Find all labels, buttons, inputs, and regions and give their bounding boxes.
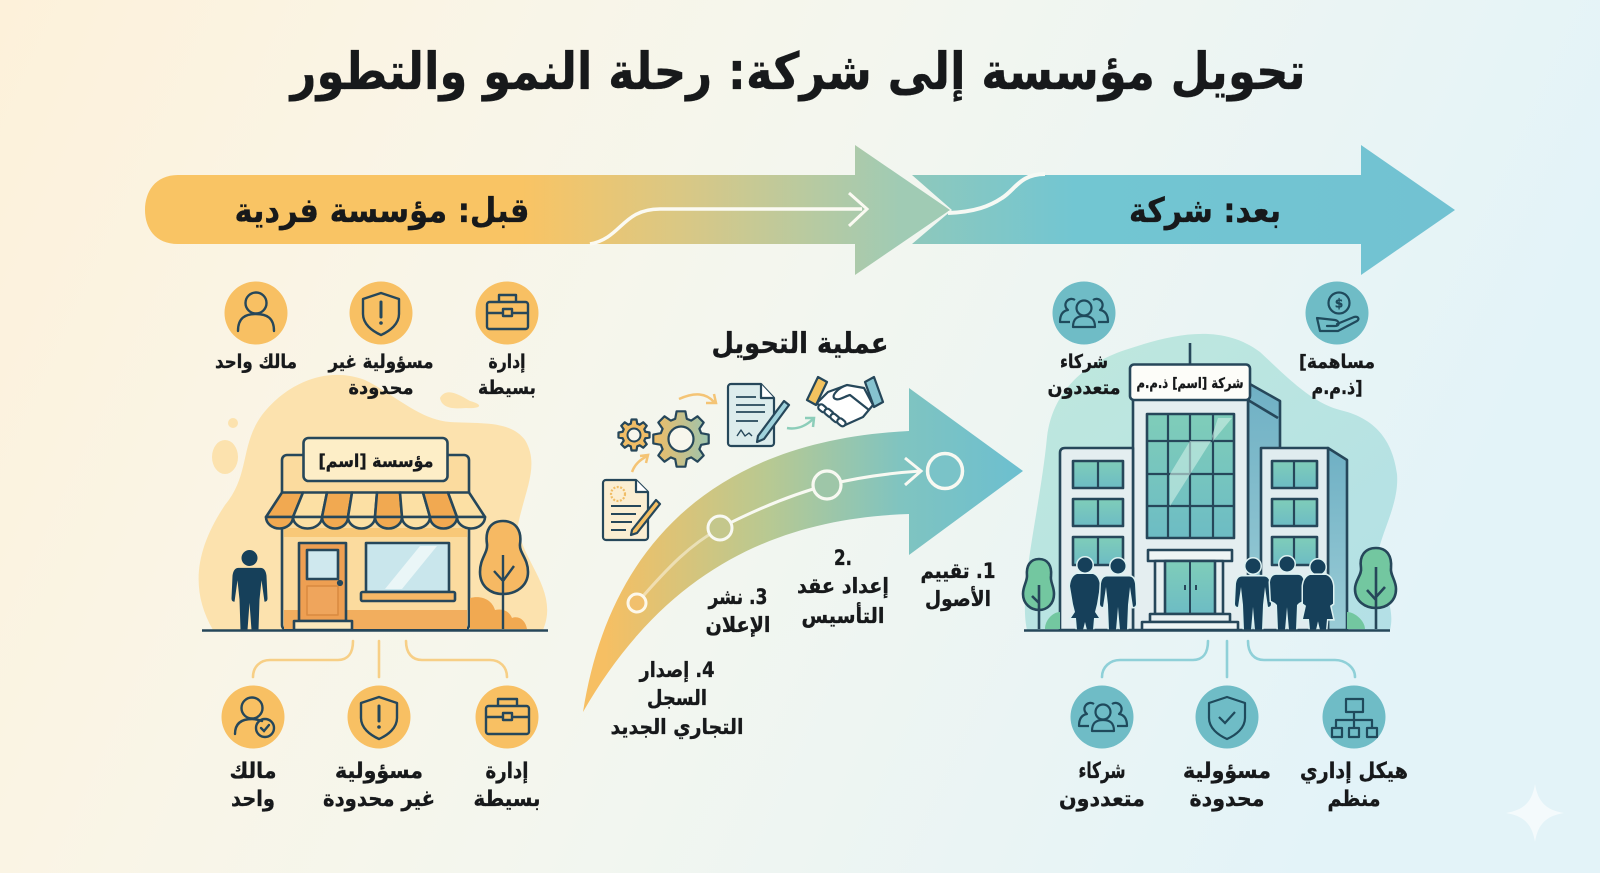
attribute: multiple partners [1048, 282, 1120, 399]
attribute: single owner [215, 282, 297, 373]
shop background blob [199, 375, 547, 630]
icon: gears [618, 411, 709, 467]
awning [266, 492, 485, 528]
person: owner [232, 550, 268, 630]
attribute: LLC contribution: [ذ.م.م [1312, 377, 1362, 399]
right wing [1261, 448, 1347, 630]
attribute: simple management: إدارة [486, 759, 528, 784]
attribute: LLC contribution: $ [1335, 296, 1343, 310]
connector lines [253, 641, 507, 677]
attribute: multiple partners: متعددون [1048, 377, 1120, 399]
top attributes row [1048, 282, 1375, 399]
icon: contract with signature [728, 384, 789, 446]
building sign [1130, 364, 1250, 400]
step 4 text: السجل [647, 686, 707, 710]
person 5 [1303, 560, 1333, 630]
heading: before: قبل: مؤسسة فردية [234, 191, 530, 231]
person 2 [1100, 558, 1136, 630]
main tower [1133, 383, 1280, 630]
step marker 1 [928, 454, 962, 488]
heading: conversion process: عملية التحويل [712, 326, 888, 360]
step 3 text: الإعلان [706, 613, 770, 637]
decorative sparkle [1506, 784, 1564, 842]
person 3 [1235, 558, 1271, 630]
attribute: unlimited liability: غير محدودة [323, 787, 435, 812]
attribute: organized structure [1300, 686, 1408, 812]
step 4 text: التجاري الجديد [610, 715, 744, 740]
arrow: to contract [679, 394, 716, 403]
attribute: simple management: إدارة [488, 351, 526, 373]
arrow: to handshake [787, 418, 814, 428]
illustration: company building [1060, 343, 1347, 630]
attribute: single owner verified [222, 686, 284, 812]
trees [1023, 548, 1396, 629]
panel: conversion process [583, 326, 1023, 740]
attribute: unlimited liability: مسؤولية غير [328, 351, 434, 373]
person 1 [1070, 558, 1100, 630]
panel: sole proprietorship [199, 282, 548, 812]
person 4 [1270, 556, 1304, 630]
arrow: to gears [632, 455, 648, 472]
bush and tree [470, 521, 528, 629]
attribute: single owner verified: مالك [230, 759, 276, 784]
entrance [1142, 550, 1238, 630]
attribute: simple management [476, 282, 538, 399]
attribute: unlimited liability: محدودة [348, 377, 414, 399]
attribute: organized structure: منظم [1328, 787, 1380, 812]
attribute: multiple partners: شركاء [1060, 351, 1108, 373]
attribute: limited liability [1183, 686, 1271, 812]
panel: company [1023, 282, 1408, 812]
attribute: multiple partners [1059, 686, 1145, 812]
step marker 4 [628, 594, 646, 612]
attribute: unlimited liability [323, 686, 435, 812]
step 1 text: الأصول [925, 585, 991, 611]
icon: document with pen [603, 480, 660, 540]
left wing [1060, 448, 1133, 630]
step 1 text [920, 559, 996, 611]
attribute: single owner verified: واحد [231, 787, 275, 812]
attribute: organized structure: هيكل إداري [1300, 759, 1408, 784]
bottom attributes row [1059, 686, 1408, 812]
attribute: simple management: بسيطة [478, 377, 536, 399]
step 3 text: 3. نشر [708, 585, 768, 609]
banner arrow: before [145, 145, 950, 275]
attribute: multiple partners: شركاء [1078, 759, 1126, 784]
top attributes row [215, 282, 538, 399]
icon: handshake [807, 377, 883, 428]
heading: after: بعد: شركة [1129, 191, 1281, 231]
attribute: single owner: مالك واحد [215, 351, 297, 373]
title: تحويل مؤسسة إلى شركة: رحلة النمو والتطور [288, 43, 1306, 102]
shop sign: مؤسسة [اسم] [318, 451, 434, 472]
shop window [361, 543, 455, 601]
step 1 text: 1. تقييم [920, 559, 996, 583]
attribute: unlimited liability [328, 282, 434, 399]
attribute: simple management [474, 686, 540, 812]
group of partners [1070, 556, 1333, 630]
step marker 3 [708, 516, 732, 540]
connector lines [1102, 641, 1355, 677]
step 4 text: 4. إصدار [639, 658, 714, 682]
step 2 text [797, 546, 889, 628]
attribute: simple management: بسيطة [474, 787, 540, 812]
step 2 text: التأسيس [802, 601, 884, 628]
step 4 text [610, 658, 744, 740]
attribute: limited liability: مسؤولية [1183, 759, 1271, 784]
step 2 text: .2 [834, 546, 852, 570]
attribute: LLC contribution [1299, 282, 1375, 399]
shop sign [304, 438, 448, 481]
building sign: شركة [اسم] ذ.م.م [1136, 376, 1244, 392]
banner arrow: after [912, 145, 1455, 275]
attribute: unlimited liability: مسؤولية [335, 759, 423, 784]
attribute: multiple partners: متعددون [1059, 787, 1145, 812]
bottom attributes row [222, 686, 540, 812]
door [294, 543, 352, 630]
illustration: shop [266, 438, 485, 630]
curved process arrow [583, 388, 1023, 712]
step marker 2 [813, 471, 841, 499]
attribute: limited liability: محدودة [1190, 787, 1264, 812]
attribute: LLC contribution: مساهمة] [1299, 351, 1375, 373]
step 3 text [706, 585, 770, 637]
company background blob [1025, 334, 1397, 630]
step 2 text: إعداد عقد [797, 574, 889, 598]
